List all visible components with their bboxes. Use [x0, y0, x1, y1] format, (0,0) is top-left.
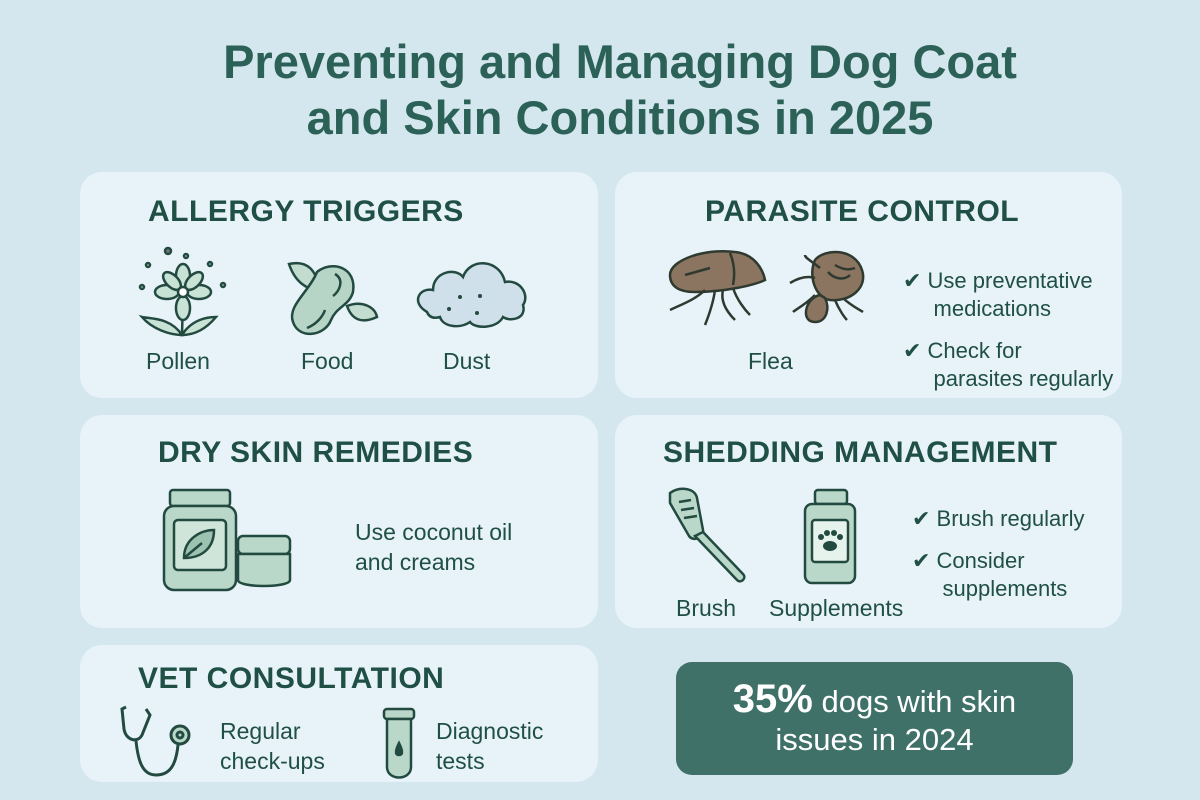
checklist: shedding: supplements: [943, 576, 1067, 601]
checklist: parasite: [903, 268, 1114, 391]
panel: parasite control: [615, 172, 1122, 398]
icon: stethoscope: [120, 706, 190, 776]
title: [223, 35, 1017, 144]
label: brush: Brush: [676, 595, 736, 621]
text: regular check-ups: Regular: [220, 718, 301, 744]
checklist: shedding: ✔ Brush regularly ✔ Consider: [912, 506, 1084, 573]
icon: dust cloud: [416, 262, 527, 328]
text: coconut oil: Use coconut oil: [355, 519, 512, 545]
callout: statistic: issues in 2024: [775, 722, 974, 757]
heading: allergy: ALLERGY TRIGGERS: [148, 195, 464, 228]
text: coconut oil: [355, 519, 512, 575]
text: diagnostic tests: tests: [436, 748, 485, 774]
text: coconut oil: and creams: [355, 549, 475, 575]
heading: dry skin: DRY SKIN REMEDIES: [158, 436, 473, 469]
icon: supplement bottle: [804, 488, 856, 584]
panel: dry skin remedies: [80, 415, 598, 628]
text: diagnostic tests: Diagnostic: [436, 718, 543, 744]
label: flea: Flea: [748, 348, 793, 374]
title: Preventing and Managing Dog Coat: [223, 35, 1017, 88]
text: regular check-ups: [220, 718, 325, 774]
text: diagnostic tests: [436, 718, 543, 774]
callout: statistic: [676, 662, 1073, 775]
checklist: parasite: ✔ Use preventative: [903, 268, 1093, 293]
checklist: parasite: parasites regularly: [934, 366, 1113, 391]
label: dust: Dust: [443, 348, 490, 374]
panel: vet consultation: [80, 645, 598, 782]
checklist: parasite: ✔ Check for: [903, 338, 1022, 363]
icon: jar and cream: [162, 488, 292, 592]
label: supplements: Supplements: [769, 595, 903, 621]
text: regular check-ups: check-ups: [220, 748, 325, 774]
icon: flower: [138, 246, 226, 336]
checklist: parasite: medications: [934, 296, 1051, 321]
heading: shedding: SHEDDING MANAGEMENT: [663, 436, 1058, 469]
icon: brush: [668, 488, 746, 583]
callout: statistic: 35% dogs with skin: [733, 677, 1016, 721]
icon: peanut: [287, 262, 378, 336]
icon: fleas: [668, 250, 864, 326]
label: pollen: Pollen: [146, 348, 210, 374]
title: and Skin Conditions in 2025: [307, 91, 933, 144]
heading: vet: VET CONSULTATION: [138, 662, 444, 695]
heading: parasite: PARASITE CONTROL: [705, 195, 1019, 228]
label: food: Food: [301, 348, 353, 374]
panel: shedding management: [615, 415, 1122, 628]
icon: test tube: [382, 708, 416, 779]
panel: allergy triggers: [80, 172, 598, 398]
